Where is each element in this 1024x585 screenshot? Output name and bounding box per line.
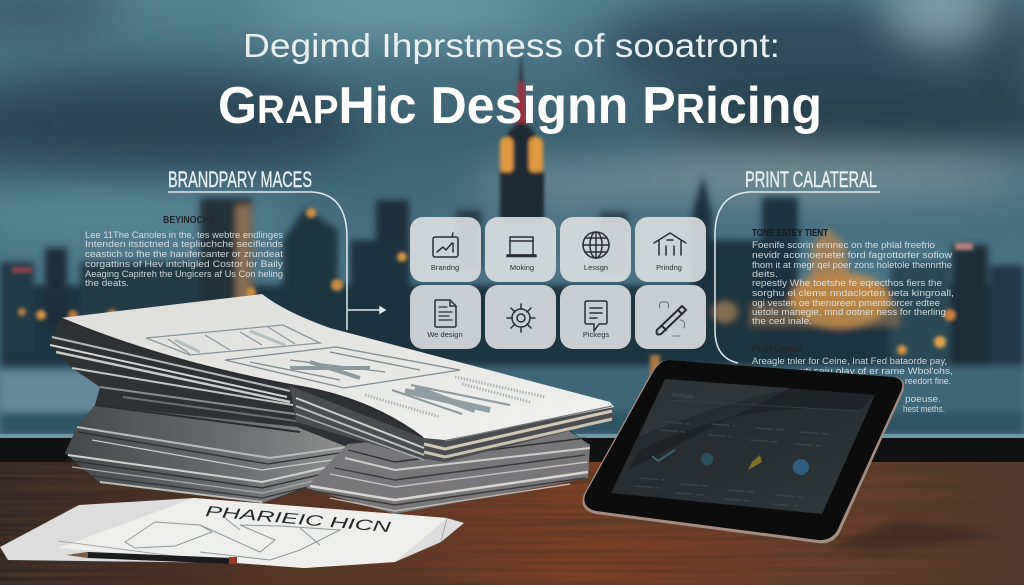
panel: print collateral (right) [715, 167, 954, 415]
left panel body text: ceastich to fhe the hanifercanter or zrundeat [85, 249, 283, 260]
icon: speech bubble [585, 301, 607, 331]
middle dark papers [50, 337, 296, 421]
main title: GRAPHic Designn PRicing [218, 77, 822, 135]
left panel body text: Lee 11The Canoles in the, tes webtre endlinges [85, 230, 283, 241]
icon: chart board [433, 233, 458, 257]
handwritten label: PHARIEIC HICN [205, 503, 392, 536]
window sill band [0, 434, 1024, 463]
tile: web design [410, 285, 481, 349]
icon: laptop [507, 237, 536, 256]
screen heading: Portfolio [672, 393, 695, 401]
right panel second body text: hest meths. [903, 404, 945, 415]
tile: branding [410, 217, 481, 282]
central skyscraper with orange lights [500, 58, 544, 222]
tablet [582, 360, 1000, 552]
tile: making [485, 217, 556, 282]
left bracket and arrow [168, 192, 385, 330]
label: branding: Brandng [431, 263, 459, 272]
right panel body text: repestly Whe toetshe fe eqrecthos fiers the [752, 278, 942, 289]
lower right paper stack [306, 425, 590, 514]
label: web design: We design [427, 330, 463, 339]
right panel second body text: reedort fine. [905, 376, 951, 387]
right panel second body text [752, 356, 953, 415]
left panel heading: BRANDPARY MACES [168, 167, 312, 192]
top sheet with sketches [60, 294, 614, 441]
right panel heading: PRINT CALATERAL [745, 167, 877, 192]
right panel body text: uetole manegie, mnd ootner ness for therling [752, 307, 946, 318]
sketch: bar chart [365, 377, 545, 417]
sketch: wireframe layout [146, 325, 320, 355]
right panel subheading: TONE EATEY TIENT [752, 227, 828, 239]
right bracket [715, 192, 880, 363]
right panel body text: the ced inale. [752, 316, 812, 327]
tile: packages [560, 285, 631, 349]
subtitle: Degimd Ihprstmess of sooatront: [243, 27, 780, 64]
icon: document [435, 300, 456, 327]
left panel subheading: BEYINOCHS [163, 214, 215, 226]
right panel second body text: Areagle tnler for Ceine, Inat Fed bataorde pay, [752, 356, 947, 367]
icon: gear [507, 304, 535, 332]
right folded paper edges [290, 386, 613, 462]
right panel second body text: poeuse. [905, 394, 941, 405]
left panel body text [85, 230, 283, 289]
right panel body text: nevidr acornoeneter ford fagrottorfer sofiow [752, 250, 952, 261]
panel: brand packages (left) [85, 167, 385, 330]
tile: settings [485, 285, 556, 349]
tablet shadow [830, 520, 1000, 552]
label: making: Moking [510, 263, 534, 272]
left panel body text: Aeaging Capitreh the Ungicers af Us Con heling [85, 269, 283, 280]
pencil [67, 552, 237, 564]
wooden table [0, 462, 1024, 585]
left panel body text: corgattins of Hev intchigled Costor lor Baily [85, 259, 283, 270]
right panel body text: deits. [752, 269, 778, 280]
label: packages: Pickegs [583, 330, 609, 339]
tablet body [582, 360, 904, 543]
icon grid [410, 217, 706, 349]
left panel body text: Intenden itstictned a tepliuchche seciflends [85, 239, 283, 250]
icon: pencil with splash [656, 302, 686, 336]
paper stack silhouette [50, 318, 612, 514]
right panel body text: sorghu el cleme nndaclorten ueta kingroall, [752, 288, 954, 299]
right panel body text: Foenife scorin ennnec on the phlal freefrio [752, 240, 935, 251]
left panel body text: the deats. [85, 278, 129, 289]
loose sketch sheets on table [0, 498, 464, 568]
hand-drawn sketch lines [125, 518, 340, 560]
lower left paper stack [65, 405, 347, 503]
right panel body text: fhom it at megr qel poer zons holetole thennrthe [752, 260, 952, 271]
tile: design [560, 217, 631, 282]
background: blurred city skyline [0, 175, 1024, 436]
label: printing: Prindng [656, 263, 682, 272]
icon: globe [583, 232, 609, 258]
background: stormy sky [0, 0, 1024, 440]
icon: house with columns [654, 233, 686, 255]
right panel body text [752, 240, 954, 327]
tile: tools [635, 285, 706, 349]
sketch: page layout [225, 347, 460, 388]
right panel second body text: uti seiu olay of er rame Wbol'ohs, [800, 366, 953, 377]
label: design: Lessgn [584, 263, 608, 272]
right panel body text: ogi vesten oe thenoreen pmentoorcer edtee [752, 298, 940, 309]
screen icons [652, 450, 809, 475]
tablet screen [611, 379, 875, 514]
stack of papers [50, 294, 614, 514]
right panel second subheading: PERFORING [752, 344, 802, 355]
tile: printing [635, 217, 706, 282]
screen content columns [635, 422, 828, 506]
